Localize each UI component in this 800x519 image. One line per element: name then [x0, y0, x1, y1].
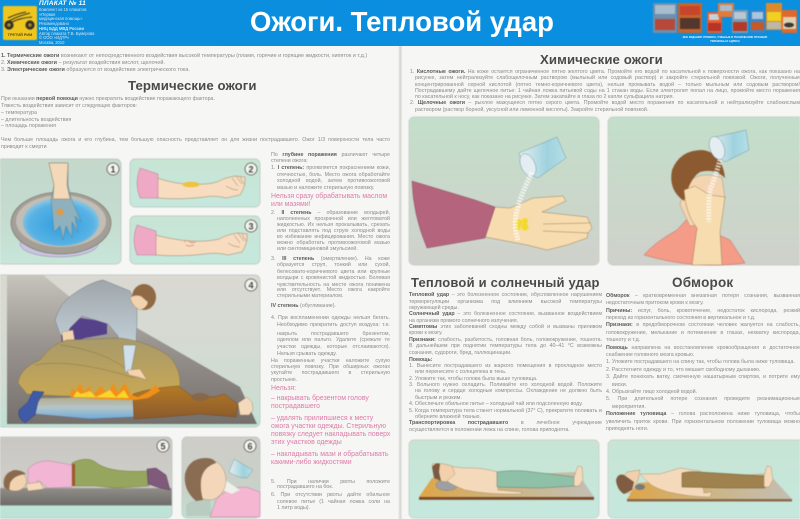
thermal burns intro text: – площадь поражения [1, 123, 56, 129]
thermal burns intro text [1, 96, 390, 150]
text column: burn degrees: можно обработать противоожоговой мазью [277, 240, 390, 246]
panel 1: hand in bowl of water [0, 159, 121, 264]
fainting text: Помощь направлена на восстановление кровообращения и достаточное [606, 345, 800, 351]
victim jacket and sleeve [133, 386, 238, 419]
fainting text: снабжение головного мозга кровью. [606, 352, 694, 358]
brown trousers [682, 472, 765, 488]
text column: burn degrees: 4. При воспламенении одежды нельзя бегать. [271, 315, 390, 321]
fainting text: виски. [612, 382, 627, 388]
text column: smothering and prohibitions: Нельзя: [271, 385, 296, 392]
kneeling man hand right [127, 369, 147, 380]
fainting text: тошноту и т.д. [606, 337, 640, 343]
text column: smothering and prohibitions: – удалять прилипшиеся к месту [271, 415, 373, 422]
heading: chemical burns: Химические ожоги [540, 52, 663, 67]
text column: smothering and prohibitions: одеялом или пальто. Удалите (срежьте те [277, 337, 390, 343]
blanket [18, 338, 180, 397]
head [4, 470, 26, 491]
board edge [627, 499, 792, 502]
header info text [39, 0, 94, 45]
victim boots [19, 391, 44, 423]
pillow [186, 499, 212, 516]
pink shirt [28, 461, 72, 488]
number badge 1: 1 [110, 164, 116, 174]
fainting text: головокружение, мелькание и потемнение в глазах, нехватку кислорода, [606, 330, 800, 336]
shoes [147, 468, 170, 490]
panel 5: person lying on side [0, 437, 172, 518]
fainting text: Признаки: в предобморочном состоянии человек жалуется на слабость, [606, 322, 800, 328]
burn mark [182, 182, 200, 187]
fainting text: приподнять ноги. [606, 426, 648, 432]
head [623, 470, 640, 493]
heat stroke text: Тепловой удар – это болезненное состояние, обусловленное нарушением [409, 292, 602, 298]
heat stroke text: терморегуляции организма под влиянием высокой температуры [409, 298, 602, 304]
chemical burns text: раствором (раствор борной, уксусной или лимонной кислоты). Закройте стерильной повязкой. [415, 106, 648, 112]
blisters [184, 240, 196, 246]
text column: burn degrees: или отсутствует. Место ожога накройте [277, 287, 390, 293]
panel: rinsing face [608, 117, 800, 265]
water stream [515, 173, 532, 240]
text column: smothering and prohibitions: 1 литр воды). [277, 505, 310, 511]
intro: burn types: 3. Электрические ожоги образуются от воздействия электрического тока. [1, 67, 190, 73]
header band [0, 0, 800, 46]
publisher caption [682, 36, 768, 42]
sleeve [412, 181, 495, 248]
header info text: Комплект из 15 плакатов [39, 7, 86, 12]
text column: burn degrees: По глубине поражения различают четыре [271, 152, 390, 158]
header info text: медицинская помощь» [39, 16, 82, 21]
chemical burns text: Пострадавшему дайте щелочное питье: 1 чайная ложка питьевой соды на 1 стакан воды. Если электролит попал на лицо, промойте место поражения [415, 88, 800, 94]
text column: smothering and prohibitions: стерильную повязку. При обширных ожогах [271, 364, 390, 370]
chemical burns text: 1. Кислотные ожоги. На коже остается ограниченное пятно желтого цвета. Промойте его водой по касательной к поверхности ожога, как показано на [410, 69, 800, 75]
floor [7, 275, 257, 424]
cup [706, 130, 749, 162]
board [627, 473, 792, 499]
feet [764, 466, 773, 487]
panel: heatstroke position with raised head [409, 440, 599, 518]
heat stroke text: 2. Уложите так, чтобы голова была выше туловища. [409, 376, 537, 382]
finger lines [543, 223, 590, 233]
header info text: © ООО «ИДТР» [39, 35, 69, 40]
sleeve [134, 225, 156, 255]
panel 2: arm with first-degree burn [130, 159, 260, 207]
fainting text: мероприятия. [612, 404, 646, 410]
green trousers [497, 471, 575, 488]
number badge 6: 6 [247, 441, 253, 451]
text column: burn degrees [271, 152, 390, 328]
header info text: «Первая [39, 12, 55, 17]
text column: smothering and prohibitions: 5. При наличии рвоты положите [271, 479, 390, 485]
heat stroke text: 3. Больного нужно охладить. Поливайте его холодной водой. Положите [409, 382, 602, 388]
board edge [419, 497, 594, 500]
panel: rinsing burn on hand [409, 117, 599, 265]
belt [72, 464, 75, 486]
text: Необходимо прекратить доступ воздуха: т.е. [277, 322, 390, 328]
victim hair [191, 393, 209, 401]
heading: fainting: Обморок [672, 275, 733, 290]
number badge 2: 2 [248, 164, 254, 174]
fainting text: 3. Дайте понюхать ватку, смоченную нашатырным спиртом, и потрите ему [606, 374, 800, 380]
fainting text: 2. Расстегните одежду и то, что мешает свободному дыханию. [606, 367, 760, 373]
text column: burn degrees: степени ожога: [271, 158, 308, 164]
face [192, 460, 226, 500]
hair [185, 458, 216, 501]
header info text: Москва, 2010 [39, 40, 64, 45]
chemical burns text: по касательной к носу, как показано на рисунке. Затем закапайте в глаза по 2 капли сульфацила натрия. [415, 94, 674, 100]
text column: burn degrees: или мазями! [271, 200, 311, 208]
fingers [226, 176, 244, 190]
fainting text: 4. Обрызгайте лицо холодной водой. [606, 389, 697, 395]
sleeve [137, 168, 158, 198]
main title: Ожоги. Тепловой удар [250, 6, 554, 37]
text column: smothering and prohibitions: какими-либо жидкостями [271, 459, 352, 466]
cup [517, 137, 566, 179]
heat stroke text: Признаки: слабость, разбитость, головная боль, головокружение, тошнота. [409, 337, 602, 343]
hair [671, 150, 725, 201]
feet [574, 466, 583, 486]
pillow [436, 480, 458, 490]
heat stroke text: осуществляется в положении лежа на спине, голова приподнята. [409, 427, 570, 433]
arm under head [26, 482, 44, 491]
text column: burn degrees: образуется струп, тонкий или сухой, [277, 262, 390, 268]
text column: smothering and prohibitions: – накрывать брезентом голову [271, 395, 369, 402]
text column: burn degrees: холодной водой, затем противоожоговой [277, 178, 390, 184]
collar pillow [222, 480, 240, 494]
heat stroke text: Солнечный удар – это болезненное состояние, вызванное воздействием [409, 311, 602, 317]
header info text: НИЦ БДД МВД России [39, 26, 84, 31]
text column: smothering and prohibitions: пострадавшего на бок. [277, 484, 333, 490]
arm [155, 233, 247, 256]
text column: burn degrees: Нельзя сразу обрабатывать маслом [271, 193, 387, 200]
victim hand [238, 397, 253, 415]
fainting text: Положение туловища – голова расположена ниже туловища, чтобы [606, 411, 800, 417]
text column: burn degrees: 3. III степень (омертвление). На коже [271, 256, 390, 262]
text column: smothering and prohibitions: простыню. [271, 377, 297, 383]
text column: burn degrees: 1. I степень: проявляется покраснением кожи, [271, 165, 390, 171]
kneeling man shirt and arms [55, 280, 137, 372]
heat stroke text: окружающей среды. [409, 305, 459, 311]
chemical burns text [410, 69, 800, 112]
text column: burn degrees: жидкостью. Их нельзя прокалывать, срезать [277, 222, 390, 228]
text column: smothering and prohibitions: накрыть пострадавшего брезентом, [277, 331, 390, 337]
number badge 5: 5 [160, 441, 166, 451]
logo: Третий Рим [3, 6, 37, 40]
text column: burn degrees: отечностью, боль. Место ожога обработайте [277, 172, 390, 178]
arm [157, 176, 245, 199]
heat stroke text: Симптомы этих заболеваний сходны между собой и вызваны приливом [409, 324, 602, 330]
text column: burn degrees: IV степень (обугливание). [271, 303, 336, 309]
bowl [11, 192, 111, 257]
book covers [653, 3, 797, 33]
fainting text [606, 293, 800, 432]
shirt [644, 220, 745, 265]
thermal burns intro text: При оказании первой помощи нужно прекратить воздействие поражающего фактора. [1, 96, 215, 102]
text column: burn degrees: во избежание инфицирования. Место ожога [277, 234, 390, 240]
text column: burn degrees: стерильными материалом. [277, 293, 343, 299]
panel 4: smothering flames with a blanket [0, 275, 260, 427]
header info text: ПЛАКАТ № 11 [39, 0, 86, 7]
flames [70, 383, 160, 400]
heat stroke text: крови к мозгу. [409, 330, 443, 336]
fainting text: Обморок – кратковременная внезапная потеря сознания, вызванная [606, 293, 800, 299]
intro: burn types [1, 53, 367, 73]
shirt [210, 487, 260, 517]
heat stroke text: 4. Обеспечьте обильное питье – холодный чай или подсоленную воду. [409, 401, 583, 407]
text column: smothering and prohibitions: повязку следует накладывать поверх [271, 431, 390, 438]
text column: burn degrees: белесовато-коричневого цвета или крупные [277, 268, 390, 274]
fainting text: увеличить приток крови. При горизонтальном положении туловища можно [606, 419, 800, 425]
thermal burns intro text: Чем больше площадь ожога и его глубина, тем большую опасность представляет он для жизни пострадавшего. Ожог 1/3 поверхности тела часто [1, 137, 390, 143]
thermal burns intro text: – длительность воздействия [1, 116, 71, 122]
blanket folds [35, 345, 135, 378]
text column: smothering and prohibitions: Нельзя срывать одежду. [277, 351, 337, 357]
burn spot [515, 218, 528, 230]
heat stroke text: или перенесите с солнцепека в тень. [415, 369, 506, 375]
face and neck [680, 175, 725, 226]
body [440, 466, 522, 494]
text column: smothering and prohibitions [271, 331, 390, 511]
heat stroke text [409, 292, 602, 433]
hair [616, 475, 634, 494]
fainting text: недостаточным притоком крови к мозгу. [606, 300, 704, 306]
kneeling man head [130, 284, 156, 310]
thermal burns intro text: приводит к смерти [1, 144, 47, 150]
heat stroke text: 5. Когда температура тела станет нормальной (37° С), прекратите поливать и [409, 408, 602, 414]
hair [432, 463, 441, 481]
text column: smothering and prohibitions: – накладывать мази и обрабатывать [271, 451, 388, 458]
water stream [709, 160, 720, 222]
text column: smothering and prohibitions: участки одежды, которые отслаиваются). [277, 344, 390, 350]
text column: burn degrees: волдыри с кровянистой жидкостью. Болевая [277, 274, 390, 280]
heading: heat and sun stroke: Тепловой и солнечный удар [411, 275, 600, 290]
text column: burn degrees: чувствительность на месте ожога понижена [277, 282, 390, 288]
hand and arm [684, 186, 725, 265]
heat stroke text: Транспортировка пострадавшего в лечебное учреждение [409, 420, 602, 426]
number badge 4: 4 [248, 280, 254, 290]
pillow [635, 484, 645, 490]
submerged hand and arm [49, 163, 81, 240]
intro: burn types: 1. Термические ожоги возникают от непосредственного воздействия высокой температуры (пламя, горячие и горящие жидкости, кипяток и т.д.) [1, 53, 367, 59]
victim legs [35, 396, 134, 419]
number badge 4 [245, 279, 257, 291]
thermal burns intro text: – температура [1, 110, 37, 116]
chemical burns text: концентрированной серной кислотой (пятно темно-коричневого цвета), нельзя промывать водой – только мыльным или содовым раствором! [415, 82, 800, 88]
heat stroke text: 1. Вынесите пострадавшего из жаркого помещения в прохладное место [409, 363, 602, 369]
number badge 3: 3 [248, 221, 254, 231]
text column: burn degrees: или синтомициновой эмульсией. [277, 246, 358, 252]
header info text: Рекомендовано [39, 21, 69, 26]
intro: burn types: 2. Химические ожоги – результат воздействия кислот, щелочей. [1, 60, 165, 66]
panel 6: giving a drink [182, 437, 260, 518]
glass [229, 459, 253, 478]
text column: smothering and prohibitions: На пораженные участки наложите сухую [271, 358, 390, 364]
heat stroke text: Помощь: [409, 357, 433, 363]
text column: smothering and prohibitions: пострадавшего [271, 403, 320, 410]
heat stroke text: сознания, судороги, бред, галлюцинации. [409, 350, 512, 356]
kneeling man trousers [61, 317, 107, 346]
text column: smothering and prohibitions: укутайте пострадавшего в стерильную [271, 370, 390, 376]
fainting text: 5. При длительной потере сознания проведите реанимационные [606, 396, 800, 402]
text column: smothering and prohibitions: ожога участки одежды. Стерильную [271, 423, 386, 430]
green trousers [72, 459, 149, 488]
text column: burn degrees: 2. II степень – образование волдырей, [271, 210, 390, 216]
body [640, 468, 712, 497]
heat stroke text: на голову и сердце холодные компрессы. Охлаждение не должно быть [415, 388, 602, 394]
publisher caption: ТЕЛЕФОНЫ И АДРЕСА [710, 40, 740, 42]
header info text: Автор плаката Т.В. Бумерова [39, 31, 94, 36]
heat stroke text: быстрым и резким. [415, 395, 462, 401]
logo caption: ТРЕТИЙ РИМ [8, 33, 32, 37]
publisher caption: ВСЕ ИЗДАНИЯ: ПРАВИЛА, УЧЕБНЫЕ И ТЕХНИЧЕСКИЕ ПОСОБИЯ [683, 36, 767, 38]
fingers [228, 233, 246, 247]
page gutter [398, 46, 403, 519]
kneeling man hand left [62, 330, 75, 347]
panel 3: arm with blisters [130, 216, 260, 264]
heading: thermal burns: Термические ожоги [128, 78, 257, 93]
thermal burns intro text: Тяжесть воздействия зависит от следующих факторов: [1, 103, 137, 109]
board [419, 472, 594, 497]
fainting text: Причины: испуг, боль, кровотечение, недостаток кислорода, резкий [606, 308, 800, 314]
text column: burn degrees: мазью и наложите стерильную повязку. [277, 184, 374, 190]
fainting text: переход из горизонтального состояния в вертикальное и т.д. [606, 315, 755, 321]
text column: smothering and prohibitions: 6. При отсутствии рвоты дайте обильное [271, 492, 390, 498]
kneeling man lower arm [123, 345, 136, 372]
hand [485, 196, 592, 250]
panel: fainting position with raised legs [608, 440, 800, 518]
fainting text: 1. Уложите пострадавшего на спину так, чтобы голова была ниже туловища. [606, 359, 795, 365]
chemical burns text: 2. Щелочные ожоги – рыхлое мажущееся пятно серого цвета. Промойте водой место поражения по касательной и нейтрализуйте слабокислым [410, 100, 800, 106]
text column: smothering and prohibitions: этих участков одежды [271, 439, 342, 446]
heat stroke text: на организм прямого солнечного излучения. [409, 318, 518, 324]
head [432, 463, 455, 482]
text column: smothering and prohibitions: солевое питье (1 чайная ложка соли на [277, 499, 390, 505]
chemical burns text: рисунке, затем нейтрализуйте слабощелочным раствором (мыльный или содовый раствор) и закройте стерильной повязкой. Ожоги, полученные [415, 75, 800, 81]
text column: burn degrees: или подставлять под струю холодной воды [277, 228, 390, 234]
heat stroke text: оберните влажной тканью. [415, 414, 481, 420]
text column: burn degrees: наполненных прозрачной или желтоватой [277, 216, 390, 222]
number badge 5 [157, 440, 169, 452]
